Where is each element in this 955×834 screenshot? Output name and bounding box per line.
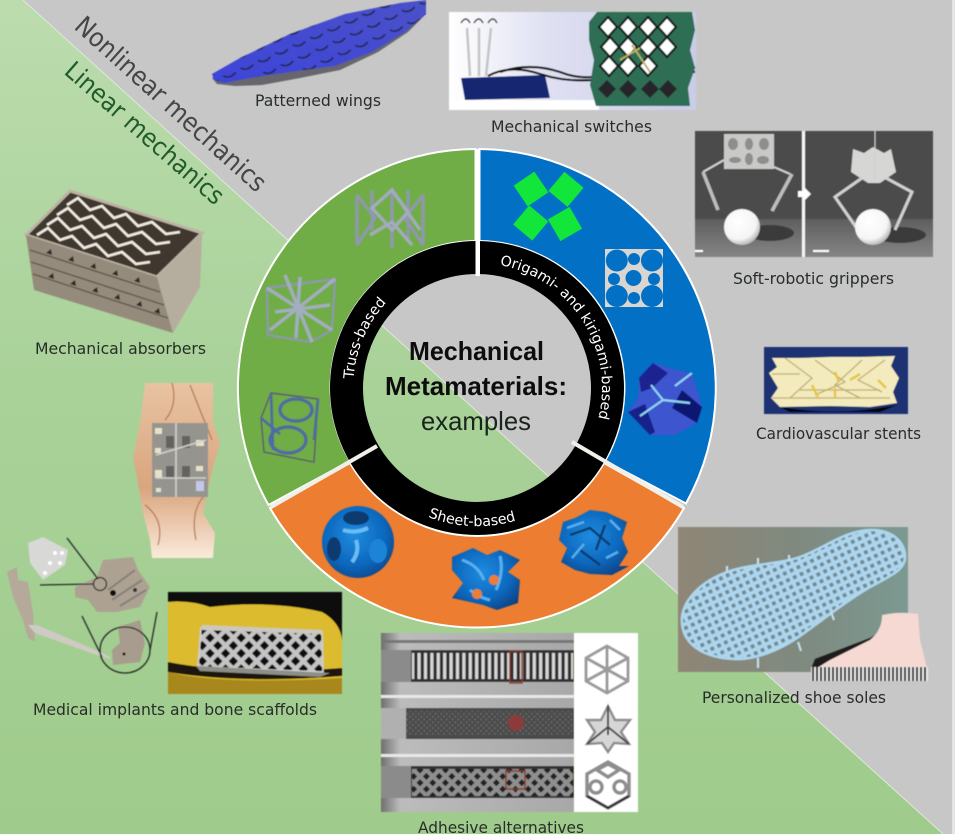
label: Mechanical switches [491, 117, 652, 136]
panel: medical implants and bone scaffolds [7, 383, 342, 719]
divider: truss and sheet [271, 446, 377, 507]
title [385, 336, 567, 436]
photo: lattice sole [678, 527, 908, 672]
ring label: origami: Origami- and kirigami-based [501, 256, 612, 420]
icon: wing [212, 0, 426, 86]
icon: truss cell rings [261, 393, 318, 462]
panel: sheet-based sector [270, 463, 684, 628]
icon: folded origami cell [628, 363, 702, 435]
panel: cardiovascular stents [756, 347, 921, 443]
panel: mechanical switches [449, 12, 696, 136]
photo: compression test rows [381, 633, 574, 812]
icons: unit cells on white [574, 633, 638, 812]
title: Metamaterials: [385, 371, 567, 401]
divider: truss and origami [476, 149, 480, 276]
icon: truss cell chiral [357, 188, 423, 248]
label: Medical implants and bone scaffolds [33, 700, 317, 719]
icon: sheet cell sphere [322, 506, 394, 578]
black category ring [346, 258, 608, 518]
background: right edge strip [952, 0, 955, 834]
illustration: jaw implant [7, 537, 157, 673]
icon: sheet cell gyroid [452, 548, 520, 610]
divider: origami and sheet [572, 442, 683, 507]
label: Cardiovascular stents [756, 424, 921, 443]
photo: knee implant [133, 383, 220, 558]
label: Mechanical absorbers [35, 339, 206, 358]
photo: gripper sequence [695, 131, 933, 257]
title: Mechanical [409, 336, 544, 366]
ring label: truss: Truss-based [343, 296, 386, 378]
panel: patterned wings [212, 0, 426, 110]
icon: truss cell octet [267, 275, 335, 342]
heading: Nonlinear mechanics: Nonlinear mechanics [68, 11, 272, 198]
heading: Linear mechanics: Linear mechanics [59, 56, 230, 211]
photo: switch device [449, 12, 696, 110]
icon: sheet cell complex [559, 510, 629, 575]
photo: honeycomb block [26, 191, 202, 333]
panel: mechanical absorbers [26, 191, 206, 358]
label: Patterned wings [255, 91, 381, 110]
icon: foot on lattice [811, 613, 928, 681]
title: examples [421, 406, 531, 436]
photo: origami stent [764, 347, 908, 414]
ring label: sheet: Sheet-based [429, 508, 515, 526]
photo: yellow glove scaffold [168, 592, 342, 694]
label: Soft-robotic grippers [733, 269, 894, 288]
panel: truss-based sector [238, 149, 476, 505]
icon: rotating squares [513, 172, 584, 241]
label: Personalized shoe soles [702, 688, 886, 707]
icon: perforated sheet [605, 249, 663, 307]
panel: soft-robotic grippers [695, 131, 933, 288]
panel: personalized shoe soles [678, 527, 928, 707]
panel: origami and kirigami sector [480, 149, 716, 504]
chart: classification wheel [236, 148, 717, 628]
panel: adhesive alternatives [381, 633, 638, 834]
